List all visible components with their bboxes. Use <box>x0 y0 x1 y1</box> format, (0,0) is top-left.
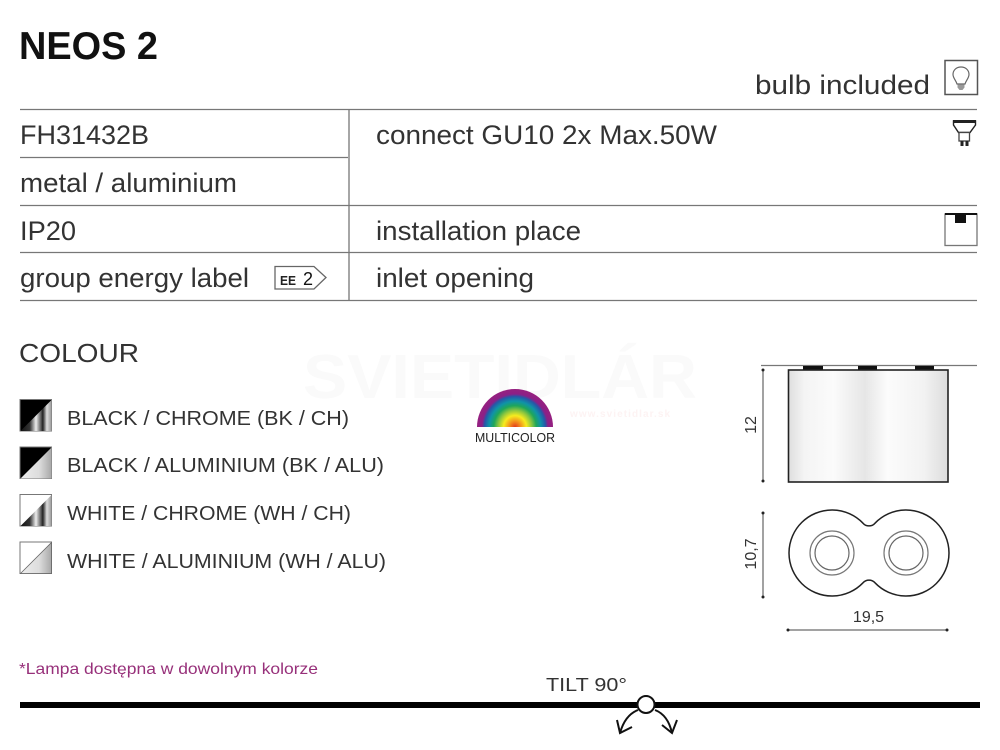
text: bulb included: bulb included <box>755 70 930 100</box>
icon: energy label EE 2: 2 <box>303 269 313 289</box>
icon: GU10 bulb <box>953 120 976 146</box>
watermark: SVIETIDLÁR <box>303 343 697 412</box>
footer bar <box>20 702 980 708</box>
label: white chrome: WHITE / CHROME (WH / CH) <box>67 502 351 525</box>
text: installation place: installation place <box>376 216 581 246</box>
icon: tilt pivot and arrows <box>617 696 677 733</box>
specification table <box>20 109 977 300</box>
diagram: top view <box>743 510 949 632</box>
dimension: width <box>786 609 948 632</box>
watermark: www.svietidlar.sk <box>569 409 670 420</box>
text: material: metal / aluminium <box>20 168 237 198</box>
icon: energy label EE 2 <box>275 266 326 289</box>
label: white aluminium: WHITE / ALUMINIUM (WH / ALU) <box>67 550 386 573</box>
title: NEOS 2 <box>19 25 158 68</box>
icon: multicolor rainbow: MULTICOLOR <box>475 430 555 445</box>
dimension: height: 12 <box>743 416 760 434</box>
text: product code: FH31432B <box>20 120 149 150</box>
colour swatch: black chrome <box>20 400 52 431</box>
colour swatch: white chrome <box>20 494 52 526</box>
label: black chrome: BLACK / CHROME (BK / CH) <box>67 407 349 430</box>
text: energy label: group energy label <box>20 263 249 293</box>
icon: bulb included <box>945 60 978 94</box>
text: tilt: TILT 90° <box>546 674 627 695</box>
icon: energy label EE 2: EE <box>280 273 296 288</box>
colour swatch: black aluminium <box>20 447 52 478</box>
text: connection: connect GU10 2x Max.50W <box>376 120 718 150</box>
dimension: width: 19,5 <box>853 609 884 626</box>
dimension: height <box>743 368 764 482</box>
note: available in any colour: *Lampa dostępna w dowolnym kolorze <box>19 661 318 678</box>
dimension: depth: 10,7 <box>743 538 760 570</box>
text: protection rating: IP20 <box>20 216 76 246</box>
label: black aluminium: BLACK / ALUMINIUM (BK / ALU) <box>67 454 384 477</box>
diagram: side view <box>743 366 977 482</box>
heading: colour: COLOUR <box>19 338 139 368</box>
dimension: depth <box>743 512 764 598</box>
icon: multicolor rainbow <box>475 389 555 445</box>
text: inlet opening: inlet opening <box>376 263 534 293</box>
icon: installation place ceiling <box>945 214 977 246</box>
colour swatch: white aluminium <box>20 542 52 574</box>
